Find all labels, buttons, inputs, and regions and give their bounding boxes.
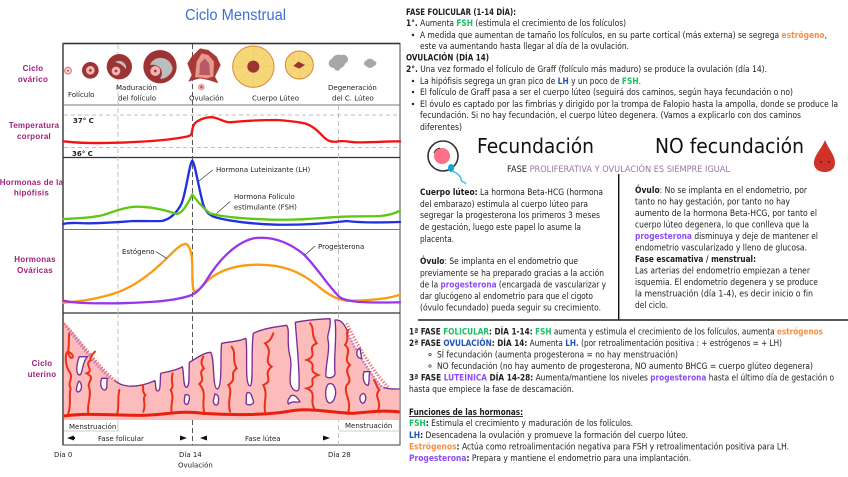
pituitary hormones chart: estimulante (FSH) (234, 204, 297, 212)
text block: follicular phase and ovulation: diferentes) (420, 123, 462, 133)
text block: follicular phase and ovulation: El folículo de Graff pasa a ser el cuerpo lúteo (seguirá dos caminos, según haya fecundación o no) (420, 87, 793, 98)
panel: no fecundación text: tanto no hay gestación, por tanto no hay (635, 196, 790, 208)
text block: follicular phase and ovulation: OVULACIÓN (DÍA 14) (406, 52, 489, 64)
pituitary hormones chart: Hormona Luteinizante (LH) (216, 166, 311, 174)
row labels: corporal (17, 132, 51, 141)
chart frame (63, 43, 400, 445)
blood vessels (66, 323, 379, 414)
day axis labels (54, 451, 351, 470)
row labels: ovárico (18, 75, 48, 84)
panel: fecundación text: previamente se ha preparado gracias a la acción (420, 268, 604, 279)
ovarian hormones chart: Estógeno (122, 248, 155, 256)
chart: menstrual cycle (0, 43, 400, 470)
shedding tissue (64, 323, 388, 387)
text block: hormone functions: FSH: Estimula el crecimiento y maduración de los folículos. (409, 418, 633, 429)
text block: follicular phase and ovulation: 1°. Aumenta FSH (estimula el crecimiento de los folículos) (406, 19, 626, 29)
panel: fecundación text (420, 188, 606, 314)
panel: no fecundación text: Fase escamativa / menstrual: (635, 255, 756, 265)
panel: no fecundación text: del ciclo. (635, 301, 668, 311)
panel: no fecundación text: la menstruación (día 1-4), es decir inicio o fin (635, 288, 813, 300)
ovarian hormones chart: Progesterona (318, 243, 364, 251)
phase strip: Menstruación (345, 422, 392, 430)
row labels: Temperatura (9, 121, 60, 130)
row labels: uterino (28, 370, 56, 379)
day axis labels: Día 28 (328, 451, 351, 459)
panel: fecundación text: de la progesterona (encargada de vascularizar y (420, 280, 606, 290)
subtitle: FASE PROLIFERATIVA Y OVULACIÓN ES SIEMPRE IGUAL (507, 163, 730, 175)
panel: no fecundación text: isquemia. El endometrio degenera y se produce (635, 278, 818, 288)
glands (76, 348, 370, 405)
row labels (0, 64, 64, 379)
text block: follicular phase and ovulation: 2°. Una vez formado el folículo de Graff (folículo más maduro) se produce la ovulación (día 14). (406, 64, 767, 75)
ovarian stage labels: Ovulación (189, 94, 224, 102)
heading: Fecundación: Fecundación (477, 134, 594, 158)
text block: follicular phase and ovulation: este va aumentando hasta llegar al día de la ovulación. (420, 41, 629, 52)
text block: phase summary (409, 326, 834, 395)
panel: no fecundación text: endometrio vascularizado y lleno de glucosa. (635, 244, 807, 254)
phase strip: Menstruación (69, 423, 116, 431)
pituitary hormones chart (63, 161, 400, 225)
icon: corpus luteum (233, 46, 313, 87)
ovarian stage labels: Degeneración (328, 84, 377, 92)
panel: fecundación text: Cuerpo lúteo: La hormona Beta-HCG (hormona (420, 188, 603, 198)
panel: fecundación text: (óvulo fecundado) pueda seguir su crecimiento. (420, 302, 601, 314)
dividers (418, 174, 848, 320)
panel: fecundación text: de gestación, luego este papel lo asume la (420, 222, 581, 233)
row labels: Ováricas (17, 266, 53, 275)
ovarian stage labels: Folículo (68, 91, 94, 99)
ovarian hormones chart (63, 238, 400, 303)
panel: fecundación text: dar glucógeno al endometrio para que el cigoto (420, 291, 593, 302)
phase strip: Fase lútea (245, 435, 281, 443)
icon: ovulation (187, 48, 221, 90)
panel: no fecundación text: Las arterias del endometrio empiezan a tener (635, 266, 810, 276)
panel: no fecundación text: progesterona disminuya y deje de mantener el (635, 232, 818, 242)
icon: blood drop (814, 140, 835, 172)
title: Ciclo Menstrual (185, 7, 286, 24)
text block: follicular phase and ovulation: A medida que aumentan de tamaño los folículos, en su parte cortical (más externa) se segrega estrógeno, (420, 30, 827, 41)
panel: fecundación text: segregar la progesterona los primeros 3 meses (420, 211, 600, 221)
text block: phase summary: 1ª FASE FOLICULAR: DÍA 1-14: FSH aumenta y estimula el crecimiento de los folículos, aumenta estrógenos (409, 326, 823, 338)
text block: hormone functions: Progesterona: Prepara y mantiene el endometrio para una implantación. (409, 453, 691, 464)
uterine cycle chart (64, 319, 400, 420)
ovarian stage labels: Maduración (116, 84, 157, 92)
panel: no fecundación text: Óvulo: No se implanta en el endometrio, por (635, 184, 807, 196)
text block: follicular phase and ovulation (406, 6, 838, 133)
panel: no fecundación text: cuerpo lúteo degenera, lo que conlleva que la (635, 220, 809, 230)
temperature chart: 37° C (73, 117, 94, 125)
endometrium (64, 319, 400, 420)
text block: follicular phase and ovulation: FASE FOLICULAR (1-14 DÍA): (406, 6, 516, 18)
phase strip: Fase folicular (98, 435, 144, 443)
panel: fecundación text: del embarazo) estimula al cuerpo lúteo para (420, 200, 588, 210)
row labels: Hormonas (14, 255, 56, 264)
ovarian stage labels: Cuerpo Lúteo (252, 94, 299, 102)
temperature chart (63, 117, 400, 158)
ovarian stage labels: del folículo (118, 94, 156, 102)
row labels: Ciclo (32, 359, 52, 368)
phase strip (64, 420, 400, 443)
day axis labels: Ovulación (178, 462, 213, 470)
panel: no fecundación text: aumento de la hormona Beta-HCG, por tanto el (635, 209, 817, 219)
panel: fecundación text: Óvulo: Se implanta en el endometrio que (420, 255, 578, 267)
ovarian stage labels: del C. Lúteo (332, 94, 374, 102)
ovarian stage labels (68, 84, 377, 102)
heading: NO fecundación: NO fecundación (655, 134, 804, 158)
text block: phase summary: 3ª FASE LUTEÍNICA DÍA 14-28: Aumenta/mantiene los niveles progesterona hasta el último día de gestación o (409, 372, 834, 384)
text block: hormone functions: Funciones de las hormonas: (409, 408, 523, 418)
text block: follicular phase and ovulation: fecundación. Si no hay fecundación, el cuerpo lúteo degenera. (Vamos a explicarlo con dos caminos (420, 110, 801, 121)
text block: phase summary: hasta que empiece la fase de descamación. (409, 384, 574, 395)
text block: phase summary: 2ª FASE OVULACIÓN: DÍA 14: Aumenta LH. (por retroalimentación positiva : + estrógenos = + LH) (409, 337, 782, 349)
ovarian cycle icons (64, 46, 376, 90)
pituitary hormones chart: Hormona Folículo (234, 193, 295, 201)
panel: no fecundación text (635, 184, 818, 311)
text block: hormone functions: Estrógenos: Actúa como retroalimentación negativa para FSH y retroalimentación positiva para LH. (409, 442, 789, 452)
icon: egg and sperm (428, 141, 466, 184)
temperature chart: 36° C (72, 150, 93, 158)
text block: hormone functions (409, 408, 789, 464)
text block: follicular phase and ovulation: La hipófisis segrega un gran pico de LH y un poco de FSH. (420, 76, 641, 87)
day axis labels: Día 14 (179, 451, 202, 459)
row labels: Ciclo (23, 64, 43, 73)
row labels: hipófisis (14, 188, 49, 198)
day axis labels: Día 0 (54, 451, 72, 459)
icon: degenerating corpus luteum (329, 55, 376, 71)
text block: hormone functions: LH: Desencadena la ovulación y promueve la formación del cuerpo lúteo. (409, 430, 688, 441)
row labels: Hormonas de la (0, 178, 64, 187)
panel: fecundación text: placenta. (420, 235, 454, 245)
text block: phase summary: SÍ fecundación (aumenta progesterona = no hay menstruación) (437, 348, 678, 360)
